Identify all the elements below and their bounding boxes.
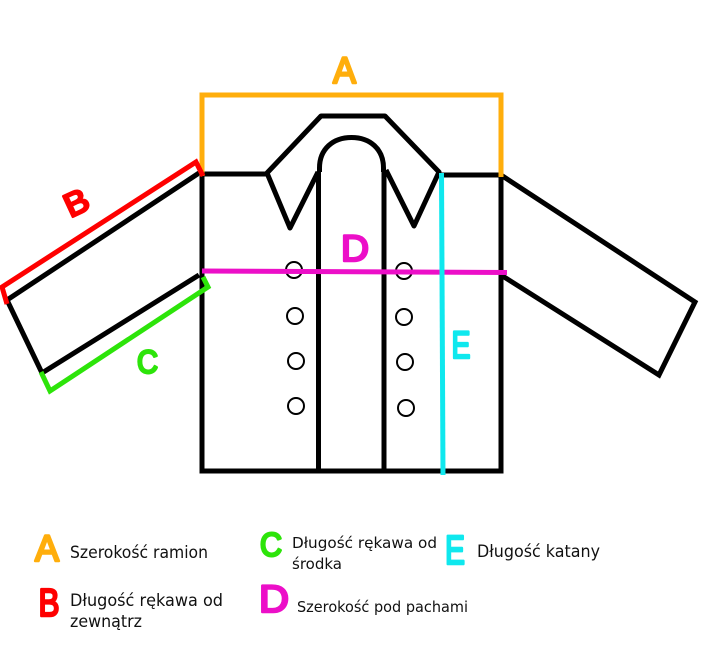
left sleeve [7, 173, 199, 373]
buttons [286, 262, 414, 416]
right sleeve [501, 175, 695, 375]
letter E: E [452, 325, 470, 367]
measure D: underarm width [202, 271, 507, 272]
letter A: A [333, 50, 356, 91]
legend B [38, 582, 223, 631]
legend B: zewnątrz [70, 612, 142, 631]
legend E [445, 527, 600, 573]
legend D: D [259, 579, 289, 621]
legend D: Szerokość pod pachami [297, 598, 468, 616]
legend B: B [38, 582, 60, 625]
legend A [35, 528, 208, 569]
letter C: C [137, 344, 158, 380]
legend C: środka [292, 555, 342, 573]
legend C: C [260, 526, 282, 563]
measure B: outer sleeve length [2, 162, 203, 304]
letter D: D [341, 228, 369, 269]
legend D [259, 579, 468, 621]
legend A: A [35, 528, 59, 569]
collar [267, 116, 439, 228]
letter B: B [58, 181, 95, 224]
measure C: inner sleeve length [41, 277, 208, 391]
legend E: E [445, 527, 465, 573]
legend E: Długość katany [477, 542, 600, 561]
jacket body [202, 172, 501, 471]
measure E: jacket length [442, 173, 443, 475]
measure A: shoulder width [202, 95, 501, 177]
legend B: Długość rękawa od [70, 591, 223, 610]
legend C [260, 526, 437, 573]
legend A: Szerokość ramion [70, 543, 208, 562]
legend C: Długość rękawa od [292, 534, 437, 552]
